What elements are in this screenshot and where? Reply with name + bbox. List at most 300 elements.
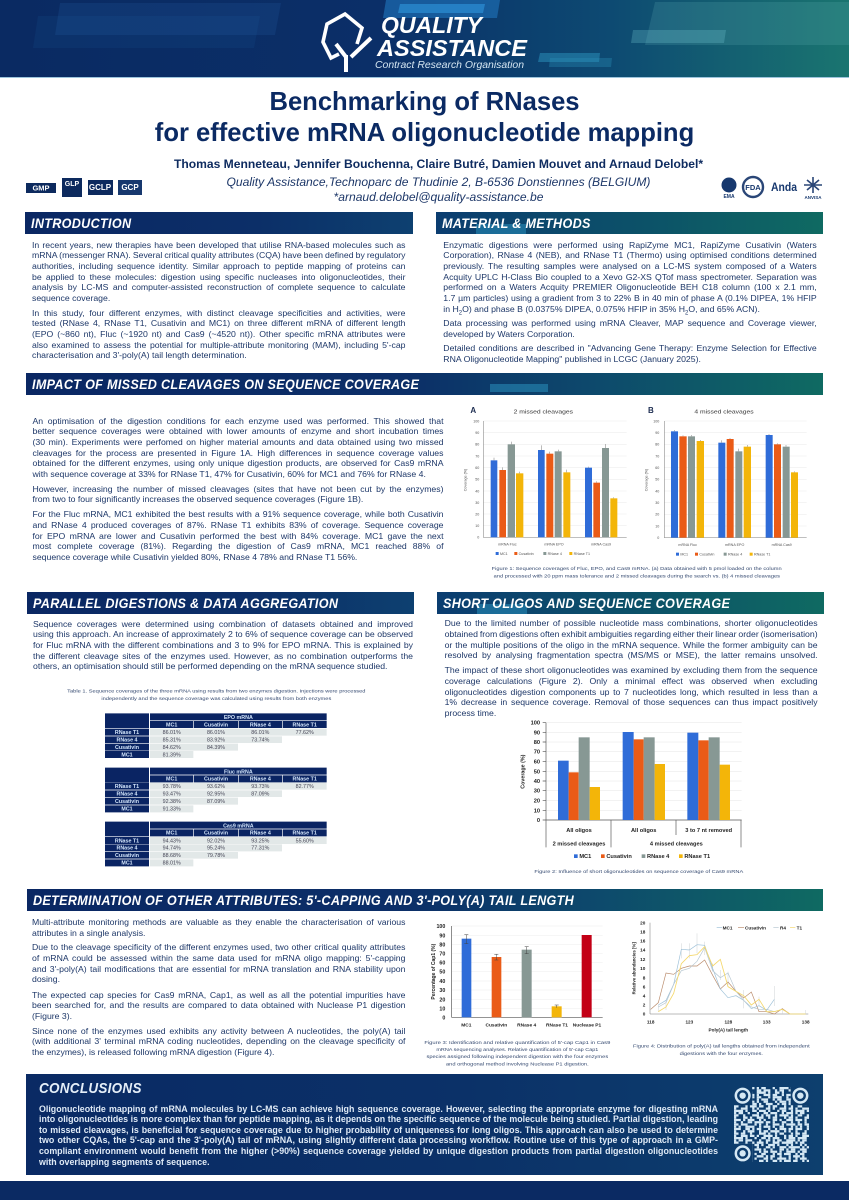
text: attributes paragraph 1: attributes in a single analysis. xyxy=(32,928,145,938)
figure 3: Cap1 percentage bar chart: 70 xyxy=(439,952,445,958)
table: EPO mRNA: 86.01% xyxy=(207,730,225,736)
heading: material and methods xyxy=(436,212,823,234)
text: attributes paragraph 3: (Figure 3). xyxy=(32,1011,72,1021)
chart A: 2 missed cleavages: RNase T1 xyxy=(574,552,590,556)
text: conclusions: two other CQAs, the 5'-cap and the 3'-poly(A) tail of mRNA, using slightly different data processing workflow. Routine use of this type of approach in a GMP- xyxy=(39,1135,718,1145)
figure 4: poly(A) tail length distribution line chart: 18 xyxy=(640,930,646,935)
chart B: 4 missed cleavages: 0 xyxy=(657,536,659,540)
chart A: 2 missed cleavages xyxy=(464,406,627,556)
figure 3: Cap1 percentage bar chart: Percentage of Cap1 (%) xyxy=(431,943,437,1000)
text: short oligos paragraph 2: oligonucleotides digestion components up to 7 nucleotides long, which resulted in less than a xyxy=(445,687,818,697)
chart A: 2 missed cleavages: mRNA Fluc xyxy=(498,542,517,546)
figure 2: influence of short oligonucleotides bar chart: 60 xyxy=(534,760,540,766)
table: Cas9 mRNA: Cusativin xyxy=(115,853,139,859)
figure 3: Cap1 percentage bar chart: 40 xyxy=(439,979,445,985)
legend: figure 2: MC1 xyxy=(579,854,591,860)
table: EPO mRNA: MC1 xyxy=(166,722,177,728)
certification logos left: GMP xyxy=(32,184,50,192)
text: conclusions xyxy=(39,1104,718,1167)
logo: Quality Assistance: QUALITY xyxy=(381,12,484,38)
table: EPO mRNA: 77.62% xyxy=(296,730,314,736)
chart A: 2 missed cleavages: 100 xyxy=(473,419,479,423)
figure 4: poly(A) tail length distribution line chart: 118 xyxy=(647,1020,655,1025)
caption: figure 2: Figure 2: Influence of short oligonucleotides on sequence coverage of Cas9 mRNA xyxy=(534,869,744,874)
figure 3: Cap1 percentage bar chart: RNase 4 xyxy=(517,1023,536,1029)
figure 3: Cap1 percentage bar chart: 0 xyxy=(442,1015,445,1021)
chart B: 4 missed cleavages: MC1 xyxy=(680,553,688,557)
table: Fluc mRNA: 93.47% xyxy=(163,791,181,797)
table: EPO mRNA: EPO mRNA xyxy=(224,715,253,721)
text: impact paragraph 3 xyxy=(32,509,444,562)
table 1: sequence coverages from two-enzyme digestions xyxy=(67,689,366,867)
figure 2: influence of short oligonucleotides bar chart: 0 xyxy=(537,818,540,824)
certification logos left: GCLP xyxy=(89,183,112,192)
table: EPO mRNA: 83.92% xyxy=(207,737,225,743)
heading: short oligos xyxy=(437,592,824,614)
text: impact paragraph 1 xyxy=(32,416,444,479)
icon: QR code xyxy=(734,1087,809,1162)
table: EPO mRNA: 84.39% xyxy=(207,745,225,751)
table: EPO mRNA: Cusativin xyxy=(204,722,228,728)
table: Cas9 mRNA: 55.60% xyxy=(296,838,314,844)
legend: figure 2: RNase 4 xyxy=(647,854,670,860)
table: EPO mRNA: 81.39% xyxy=(163,752,181,758)
figure 4: poly(A) tail length distribution line chart: 123 xyxy=(685,1020,694,1025)
chart A: 2 missed cleavages: 0 xyxy=(477,536,479,540)
figures 3 and 4 xyxy=(424,920,811,1066)
text: attributes paragraph 3 xyxy=(32,990,406,1021)
figure 3: Cap1 percentage bar chart: 30 xyxy=(439,988,445,994)
heading: impact of missed cleavages xyxy=(26,373,823,395)
text: parallel digestions paragraph: Sequence coverages were determined using combination of datasets obtained and improved xyxy=(33,619,413,629)
chart A: 2 missed cleavages: mRNA EPO xyxy=(544,542,564,546)
text: methods paragraph 2 xyxy=(443,318,817,339)
text: short oligos paragraph 2 xyxy=(444,665,818,718)
heading: parallel digestions xyxy=(27,592,414,614)
text: attributes paragraph 1: Multi-attribute monitoring methods are valuable as they enable the characterisation of various xyxy=(32,917,405,927)
text: parallel digestions paragraph: for Fluc mRNA with the different combinations and 3 to 9% for EPO mRNA. This is explained by xyxy=(33,640,413,650)
logo: Quality Assistance xyxy=(321,12,528,72)
chart B: 4 missed cleavages: 4 missed cleavages xyxy=(694,409,754,415)
affiliation and email xyxy=(227,175,650,204)
panel: material and methods xyxy=(436,212,823,364)
table: EPO mRNA: 86.01% xyxy=(251,730,270,736)
table: EPO mRNA: RNase T1 xyxy=(293,722,317,728)
figure 4: poly(A) tail length distribution line chart: 128 xyxy=(724,1020,733,1025)
caption: figure 1: Figure 1: Sequence coverages of Fluc, EPO, and Cas9 mRNA. (a) Data obtained with 5 pmol loaded on the column xyxy=(492,566,782,571)
figure 2: influence of short oligonucleotides bar chart: 80 xyxy=(534,740,540,746)
text: introduction paragraph 1: authorities, including sequence identity. Similar approach to peptide mapping of proteins can xyxy=(32,261,406,271)
heading: parallel digestions: PARALLEL DIGESTIONS & DATA AGGREGATION xyxy=(33,595,338,611)
chart B: 4 missed cleavages: 40 xyxy=(655,489,659,493)
figure 3: Cap1 percentage bar chart: MC1 xyxy=(461,1023,472,1029)
legend: figure 4: Cusativin xyxy=(745,925,766,930)
chart A: 2 missed cleavages: 60 xyxy=(475,466,479,470)
table: Cas9 mRNA: 88.01% xyxy=(163,861,181,867)
heading: determination of other attributes: DETERMINATION OF OTHER ATTRIBUTES: 5'-CAPPING AND 3'-POLY(A) TAIL LENGTH xyxy=(33,892,574,908)
text: attributes paragraph 4: the enzymes), is released following mRNA digestion (Figure 4). xyxy=(32,1047,274,1057)
figure 2: influence of short oligonucleotides bar chart: 3 to 7 nt removed xyxy=(685,828,733,834)
figure 4: poly(A) tail length distribution line chart: 20 xyxy=(640,920,646,925)
text: methods paragraph 1: performed on a Waters Acquity PREMIER Oligonucleotide BEH C18 column (100 x 2.1 mm, xyxy=(443,282,817,292)
text: attributes paragraph 3: been searched for, and the results are compared to data obtained with Nuclease P1 digestion xyxy=(32,1000,405,1010)
figure 3: Cap1 percentage bar chart: 50 xyxy=(439,970,445,976)
text: methods paragraph 1: previously. The resulting samples were analysed on a LC-MS system composed of a Waters xyxy=(443,261,817,271)
chart A: 2 missed cleavages: 50 xyxy=(475,478,479,482)
table: Fluc mRNA: 93.62% xyxy=(207,784,225,790)
title xyxy=(155,88,694,147)
text: attributes paragraph 2 xyxy=(32,942,406,984)
text: parallel digestions paragraph xyxy=(33,619,413,671)
heading: impact of missed cleavages: IMPACT OF MISSED CLEAVAGES ON SEQUENCE COVERAGE xyxy=(32,376,419,392)
chart A: 2 missed cleavages: 40 xyxy=(475,489,479,493)
figure 4: poly(A) tail length distribution line chart: 0 xyxy=(643,1012,646,1017)
text: introduction paragraph 2: tested (RNase 4, RNase T1, Cusativin and MC1) on three different mRNA of different length xyxy=(32,318,406,328)
panel: conclusions xyxy=(26,1074,823,1175)
table: EPO mRNA: RNase 4 xyxy=(250,722,271,728)
regulatory agency logos right: FDA xyxy=(745,183,761,192)
figure 2: influence of short oligonucleotides bar chart: All oligos xyxy=(566,828,592,834)
chart A: 2 missed cleavages: Cusativin xyxy=(519,552,534,556)
legend: figure 4: MC1 xyxy=(723,925,733,930)
text: attributes paragraph 3: The expected cap species for Cas9 mRNA, Cap1, as well as all the potential impurities have xyxy=(32,990,405,1000)
chart B: 4 missed cleavages: mRNA Fluc xyxy=(678,543,697,547)
text: methods paragraph 3: RNA Oligonucleotide Mapping" published in LCGC (January 2025). xyxy=(443,354,701,364)
regulatory agency logos right xyxy=(722,176,822,200)
caption: figure 3: mRNA sequencing analyses. Relative quantification of 5'-cap Cap1 xyxy=(436,1047,599,1052)
text: methods paragraph 1: Corporation), RNase 4 (NEB), and RNase T1 (Thermo) using optimised conditions determined xyxy=(443,250,817,260)
chart B: 4 missed cleavages: RNase 4 xyxy=(728,553,742,557)
heading: introduction xyxy=(25,212,413,234)
chart B: 4 missed cleavages: 50 xyxy=(655,478,659,482)
text: impact paragraph 3: sequence coverage while Cusativin yielded 80%, RNase 4 78% and RNase T1 56%. xyxy=(32,552,357,562)
table: EPO mRNA xyxy=(105,713,327,758)
table: Cas9 mRNA: Cas9 mRNA xyxy=(223,823,254,829)
chart A: 2 missed cleavages: 2 missed cleavages xyxy=(514,409,573,415)
text: impact paragraph 3: most complete coverage (81%). Regarding the digestion of Cas9 mRNA, MC1 reached 88% of xyxy=(32,541,444,551)
heading: introduction: INTRODUCTION xyxy=(31,215,131,231)
text: impact paragraph 3: For the Fluc mRNA, MC1 exhibited the best results with a 91% sequence coverage, while both Cusativin xyxy=(32,509,444,519)
panel: parallel digestions and data aggregation xyxy=(27,592,414,867)
chart B: 4 missed cleavages: mRNA EPO xyxy=(725,543,744,547)
chart B: 4 missed cleavages: 100 xyxy=(653,419,659,423)
chart A: 2 missed cleavages: MC1 xyxy=(500,552,508,556)
text: methods paragraph 1: in H2O) and phase B (0.0375% DIPEA, 0.075% HFIP in 35% H2O, and 65% ACN). xyxy=(443,304,760,316)
figure 4: poly(A) tail length distribution line chart: 12 xyxy=(640,957,646,962)
table: Cas9 mRNA: 93.25% xyxy=(251,838,270,844)
chart B: 4 missed cleavages: 30 xyxy=(655,501,659,505)
chart B: 4 missed cleavages: B xyxy=(648,406,654,415)
chart A: 2 missed cleavages: RNase 4 xyxy=(548,552,562,556)
text: attributes paragraph 2: dosing. xyxy=(32,974,60,984)
table: Fluc mRNA: 93.73% xyxy=(251,784,270,790)
text: impact paragraph 1: better sequence coverages were obtained with lower amounts of enzyme and short incubation times xyxy=(32,426,444,436)
certification logos left: GLP xyxy=(65,181,80,188)
text: introduction paragraph 2: characterisation and 3'-poly(A) tail length determination. xyxy=(32,350,247,360)
table: EPO mRNA: MC1 xyxy=(121,752,133,758)
text: methods paragraph 3 xyxy=(443,343,817,364)
text: impact paragraph 1: An optimisation of the digestion conditions for each enzyme used was performed. This showed that xyxy=(32,416,444,426)
figure 2: influence of short oligonucleotides bar chart: 70 xyxy=(534,750,540,756)
legend: figure 2: RNase T1 xyxy=(684,854,710,860)
text: introduction paragraph 1: sequence coverage. xyxy=(32,293,110,303)
text: attributes paragraph 4 xyxy=(32,1026,406,1057)
certification logos left: GCP xyxy=(121,183,139,192)
chart A: 2 missed cleavages: 20 xyxy=(475,512,479,516)
legend: figure 2: Cusativin xyxy=(606,854,632,860)
table: Cas9 mRNA: 88.68% xyxy=(163,853,181,859)
figure 2: influence of short oligonucleotides bar chart: 10 xyxy=(534,808,540,814)
text: introduction paragraph 1: In recent years, new therapies have been developed that utilise RNA-based molecules such as xyxy=(32,240,406,250)
table: Fluc mRNA: Cusativin xyxy=(115,799,139,805)
caption: figure 4: digestions with the four enzymes. xyxy=(680,1051,763,1056)
title: for effective mRNA oligonucleotide mapping xyxy=(155,119,694,147)
text: short oligos paragraph 2: coverage calculations (Figure 2). Only a minimal effect was observed when excluding xyxy=(445,676,818,686)
logo: Quality Assistance: Contract Research Organisation xyxy=(375,59,524,71)
caption: figure 1 xyxy=(492,566,782,578)
panel: introduction xyxy=(25,212,413,360)
header banner xyxy=(0,0,849,78)
figure 3: Cap1 percentage bar chart: RNase T1 xyxy=(546,1023,568,1029)
table: Cas9 mRNA: MC1 xyxy=(166,831,177,837)
text: short oligos paragraph 2: 1% decrease in sequence coverage. Removal of those sequences can thus impact positively xyxy=(445,697,818,707)
table caption: Table 1. Sequence coverages of the three mRNA using results from two enzymes digestion. Injections were processed xyxy=(67,689,366,694)
figure 2: influence of short oligonucleotides bar chart: Coverage (%) xyxy=(521,754,527,789)
table: Cas9 mRNA: RNase 4 xyxy=(250,831,271,837)
chart A: 2 missed cleavages: 80 xyxy=(475,443,479,447)
legend: figure 4: T1 xyxy=(797,925,802,930)
text: impact paragraph 3: and RNase 4 produced coverages of 87%. RNase T1 exhibits 83% of coverage. Sequence coverage xyxy=(32,520,444,530)
figure 4: poly(A) tail length distribution line chart: 133 xyxy=(763,1020,771,1025)
figure 4: poly(A) tail length distribution line chart xyxy=(632,920,811,1056)
table: Fluc mRNA: 92.95% xyxy=(207,791,225,797)
text: short oligos paragraph 2: The impact of these short oligonucleotides was examined by excluding them from the sequence xyxy=(445,665,818,675)
authors: Thomas Menneteau, Jennifer Bouchenna, Claire Butré, Damien Mouvet and Arnaud Delobel* xyxy=(174,157,703,171)
figure 2: influence of short oligonucleotides bar chart xyxy=(520,720,744,874)
table: Fluc mRNA: RNase T1 xyxy=(293,777,317,783)
table: Cas9 mRNA: 94.43% xyxy=(163,838,181,844)
figure 3: Cap1 percentage bar chart: Cusativin xyxy=(485,1023,507,1029)
table: Cas9 mRNA xyxy=(105,822,327,867)
text: introduction paragraph 1: analysis by LC-MS and computer-assisted reconstruction of complete sequence to calculate xyxy=(32,282,406,292)
text: attributes paragraph 4: Since none of the enzymes used exhibits any activity between A nucleotides, the poly(A) tail xyxy=(32,1026,405,1036)
table: EPO mRNA: RNase T1 xyxy=(115,730,139,736)
text: methods paragraph 1: Enzymatic digestions were performed using RapiZyme MC1, RapiZyme Cusativin (Waters xyxy=(443,240,817,250)
chart B: 4 missed cleavages xyxy=(644,406,807,557)
table: EPO mRNA: 73.74% xyxy=(251,737,270,743)
text: short oligos paragraph 1: obtained from digestions often exhibit ambiguities regarding either their linear order (isomerisation) xyxy=(445,629,818,639)
table: Cas9 mRNA: MC1 xyxy=(121,861,133,867)
table: EPO mRNA: 84.62% xyxy=(163,745,181,751)
chart B: 4 missed cleavages: Cusativin xyxy=(699,553,714,557)
table: EPO mRNA: RNase 4 xyxy=(116,737,138,743)
text: methods paragraph 1: 1.7 µm particles) using a gradient from 3 to 22% B in 40 min of phase A (0.1% DIPEA, 1% HFIP xyxy=(443,293,817,303)
chart B: 4 missed cleavages: RNase T1 xyxy=(754,553,770,557)
table: Fluc mRNA: RNase 4 xyxy=(116,791,138,797)
text: parallel digestions paragraph: using this approach. An increase of approximately 2 to 6% of sequence coverage can be observed xyxy=(33,629,413,639)
figure 3: Cap1 percentage bar chart: 10 xyxy=(439,1006,445,1012)
text: introduction paragraph 2: also examined to assess the potential for multiple-attribute monitoring (MAM), including 5'-cap xyxy=(32,340,406,350)
text: parallel digestions paragraph: the different cleavage sites of the enzymes used. However, as no combination outperforms the xyxy=(33,651,413,661)
caption: figure 4: Figure 4: Distribution of poly(A) tail lengths obtained from independent xyxy=(633,1044,811,1049)
table: EPO mRNA: 85.31% xyxy=(163,737,181,743)
text: methods paragraph 1: Acquity UPLC H-Class Bio coupled to a Xevo G2-XS QTof mass spectrometer. Separation was xyxy=(443,272,817,282)
text: impact paragraph 3: for EPO mRNA are lower and Cusativin performed the best with 84% coverage. MC1 gave the next xyxy=(32,531,444,541)
figure 2: influence of short oligonucleotides bar chart: 40 xyxy=(534,779,540,785)
chart A: 2 missed cleavages: 90 xyxy=(475,431,479,435)
figure 3: Cap1 percentage bar chart: 100 xyxy=(436,924,445,930)
heading: short oligos: SHORT OLIGOS AND SEQUENCE COVERAGE xyxy=(443,595,730,611)
text: attributes paragraph 4: (with additional 3' terminal mRNA coding nucleotides, depending on the cleavage specificity of xyxy=(32,1036,405,1046)
table: Cas9 mRNA: 94.74% xyxy=(163,846,181,852)
table: Cas9 mRNA: Cusativin xyxy=(204,831,228,837)
text: attributes paragraph 2: Due to the cleavage specificity of the different enzymes used, two other critical quality attributes xyxy=(32,942,405,952)
figure 2: influence of short oligonucleotides bar chart: All oligos xyxy=(631,828,656,834)
logo: Quality Assistance: ASSISTANCE xyxy=(376,35,528,61)
table: Cas9 mRNA: RNase 4 xyxy=(116,846,138,852)
text: introduction paragraph 1 xyxy=(32,240,406,303)
table caption xyxy=(67,689,366,701)
panel: impact of missed cleavages xyxy=(26,373,823,578)
text: introduction paragraph 2: (EPO (~860 nt), Fluc (~1920 nt) and Cas9 (~4520 nt)). Other specific mRNA attributes were xyxy=(32,329,406,339)
figure 4: poly(A) tail length distribution line chart: Relative abundancies [%] xyxy=(632,942,637,994)
table: Fluc mRNA: MC1 xyxy=(166,777,177,783)
table: Fluc mRNA: RNase 4 xyxy=(250,777,271,783)
chart B: 4 missed cleavages: 20 xyxy=(655,513,659,517)
text: methods paragraph 3: Detailed conditions are described in "Advancing Gene Therapy: Enzyme Selection for Effective xyxy=(443,343,817,353)
figure 4: poly(A) tail length distribution line chart: Poly(A) tail length xyxy=(709,1027,748,1032)
table: Cas9 mRNA: 95.24% xyxy=(207,846,225,852)
table: EPO mRNA: 86.01% xyxy=(163,730,181,736)
table: Fluc mRNA: 82.77% xyxy=(296,784,314,790)
table: Fluc mRNA: 93.78% xyxy=(163,784,181,790)
title: Benchmarking of RNases xyxy=(269,88,580,116)
text: conclusions: with overlapping segments of sequence. xyxy=(39,1157,210,1167)
table: Cas9 mRNA: 79.78% xyxy=(207,853,225,859)
table: Fluc mRNA: 87.09% xyxy=(251,791,270,797)
text: methods paragraph 2: developed by Waters Corporation. xyxy=(443,329,575,339)
text: impact paragraph 1: cleavages for the process are presented in Figure 1A. High differences in sequence coverage values xyxy=(32,448,444,458)
figure 4: poly(A) tail length distribution line chart: 10 xyxy=(640,966,646,971)
figure 2: influence of short oligonucleotides bar chart: 100 xyxy=(531,721,540,727)
chart A: 2 missed cleavages: 30 xyxy=(475,501,479,505)
caption: figure 3: Figure 3: Identification and relative quantification of 5'-cap Cap1 in Cas9 xyxy=(424,1040,611,1045)
table: EPO mRNA: Cusativin xyxy=(115,745,139,751)
table: Fluc mRNA: MC1 xyxy=(121,807,133,813)
caption: figure 3: species assigned following independent digestion with the four enzymes xyxy=(426,1054,609,1059)
affiliation and email: *arnaud.delobel@quality-assistance.be xyxy=(334,190,543,204)
table: Fluc mRNA: RNase T1 xyxy=(115,784,139,790)
text: parallel digestions paragraph: others, an optimisation should still be performed depending on the mRNA sequence studied. xyxy=(33,661,387,671)
text: introduction paragraph 2 xyxy=(32,308,406,360)
text: introduction paragraph 1: mRNA (messenger RNA). Several critical quality attributes (CQA) have been defined by regulatory xyxy=(32,250,406,260)
text: conclusions: compliant environment would benefit from the higher (>90%) sequence coverage yielded by unique digestion products from partial digestion oligonucleotides xyxy=(39,1146,718,1156)
regulatory agency logos right: EMA xyxy=(723,194,735,200)
chart B: 4 missed cleavages: Coverage (%) xyxy=(644,469,648,491)
table: Cas9 mRNA: 92.02% xyxy=(207,838,225,844)
text: short oligos paragraph 1: Due to the limited number of possible nucleotide mass combinations, shorter oligonucleotides xyxy=(445,618,818,628)
chart A: 2 missed cleavages: Coverage (%) xyxy=(464,469,468,491)
heading: conclusions: CONCLUSIONS xyxy=(39,1080,142,1097)
heading: determination of other attributes xyxy=(27,889,823,911)
table: Fluc mRNA: Fluc mRNA xyxy=(224,769,253,775)
text: impact paragraph 1: with sequence coverage at 33% for RNase T1, 47% for Cusativin, 60% for MC1 and 76% for RNase 4. xyxy=(32,469,426,479)
chart A: 2 missed cleavages: 70 xyxy=(475,454,479,458)
legend: figure 4: R4 xyxy=(780,925,786,930)
figure 3: Cap1 percentage bar chart xyxy=(424,924,611,1066)
chart A: 2 missed cleavages: mRNA Cas9 xyxy=(591,542,611,546)
figure 3: Cap1 percentage bar chart: 60 xyxy=(439,961,445,967)
figure 4: poly(A) tail length distribution line chart: 14 xyxy=(640,948,646,953)
text: conclusions: Oligonucleotide mapping of mRNA molecules by LC-MS can achieve high sequence coverage. However, selecting the appropriate enzyme for digesting mRNA xyxy=(39,1104,718,1114)
panel: determination of other attributes xyxy=(27,889,823,1066)
figure 4: poly(A) tail length distribution line chart: 6 xyxy=(643,984,646,989)
text: impact paragraph 2 xyxy=(32,484,444,504)
figure 2: influence of short oligonucleotides bar chart: 90 xyxy=(534,730,540,736)
chart A: 2 missed cleavages: 10 xyxy=(475,524,479,528)
text: methods paragraph 2: Data processing was performed using mRNA Cleaver, MAP sequence and Coverage viewer, xyxy=(443,318,817,328)
caption: figure 1: and processed with 20 ppm mass tolerance and 2 missed cleavages during the search vs. (b) 4 missed cleavages xyxy=(494,573,781,578)
chart B: 4 missed cleavages: 90 xyxy=(655,431,659,435)
regulatory agency logos right: ANVISA xyxy=(804,195,822,200)
figure 2: influence of short oligonucleotides bar chart: 50 xyxy=(534,769,540,775)
table: Fluc mRNA: 91.33% xyxy=(163,807,181,813)
text: conclusions: to missed cleavages, is beneficial for sequence coverage due to higher probability of uniqueness for long oligos. This approach can also be used to determine xyxy=(39,1125,718,1135)
figure 2: influence of short oligonucleotides bar chart: 2 missed cleavages xyxy=(553,842,605,848)
text: attributes paragraph 1 xyxy=(32,917,406,938)
figure 4: poly(A) tail length distribution line chart: 4 xyxy=(643,994,646,999)
chart B: 4 missed cleavages: 60 xyxy=(655,466,659,470)
table: Fluc mRNA xyxy=(105,768,327,813)
figure 4: poly(A) tail length distribution line chart: 16 xyxy=(640,939,646,944)
figure 4: poly(A) tail length distribution line chart: 2 xyxy=(643,1003,646,1008)
table: Fluc mRNA: Cusativin xyxy=(204,777,228,783)
table: Cas9 mRNA: RNase T1 xyxy=(115,838,139,844)
panel: short oligos and sequence coverage xyxy=(437,592,824,874)
figure 1: sequence coverage bar charts xyxy=(464,406,807,578)
text: short oligos paragraph 1 xyxy=(445,618,818,660)
text: impact paragraph 1: obtained for the different enzymes, using only unique digestion products, are observed for Cas9 mRNA xyxy=(32,458,444,468)
footer bar xyxy=(0,1181,849,1200)
heading: material and methods: MATERIAL & METHODS xyxy=(442,215,591,231)
text: short oligos paragraph 2: process time. xyxy=(445,708,496,718)
figure 2: influence of short oligonucleotides bar chart: 4 missed cleavages xyxy=(650,842,703,848)
text: introduction paragraph 2: In this study, four different enzymes, with distinct cleavage specificities and activities, were xyxy=(32,308,406,318)
text: conclusions: into oligonucleotides is more complex than for peptide mapping, as it depends on the specific sequence of the molecule being studied. Partial digestion, leading xyxy=(39,1114,718,1124)
text: methods paragraph 1 xyxy=(443,240,817,316)
chart A: 2 missed cleavages: A xyxy=(470,406,476,415)
figure 3: Cap1 percentage bar chart: 20 xyxy=(439,997,445,1003)
text: short oligos paragraph 1: resolved by analysing fragmentation spectra (MS/MS or MSE), the latter remains unsolved. xyxy=(445,650,818,660)
table caption: independently and the sequence coverage was calculated using results from both enzymes xyxy=(101,696,332,701)
text: attributes paragraph 2: of mRNA could be assessed within the same data used for mRNA oligo mapping: 5'-capping xyxy=(32,953,405,963)
caption: figure 3 xyxy=(424,1040,611,1066)
text: short oligos paragraph 1: or the multiple positions of the oligo in the mRNA sequence. While the former ambiguity can be xyxy=(445,640,818,650)
chart B: 4 missed cleavages: mRNA Cas9 xyxy=(772,543,792,547)
legend: figure 2 xyxy=(574,854,710,860)
figure 3: Cap1 percentage bar chart: 80 xyxy=(439,942,445,948)
figure 2: influence of short oligonucleotides bar chart: 30 xyxy=(534,789,540,795)
figure 3: Cap1 percentage bar chart: Nuclease P1 xyxy=(573,1023,602,1029)
text: impact paragraph 1: (30 min). Experiments were perfomed on higher material amounts and data obtained using two missed xyxy=(32,437,444,447)
caption: figure 4 xyxy=(633,1044,811,1056)
chart B: 4 missed cleavages: 10 xyxy=(655,524,659,528)
caption: figure 3: and orthogonal method involving Nuclease P1 digestion. xyxy=(446,1061,589,1066)
regulatory agency logos right: Anda xyxy=(771,180,797,194)
text: attributes paragraph 2: and 3'-poly(A) tail modifications that are essential for mRNA translation and RNA stability upon xyxy=(32,964,405,974)
figure 3: Cap1 percentage bar chart: 90 xyxy=(439,933,445,939)
table: Fluc mRNA: 87.09% xyxy=(207,799,225,805)
